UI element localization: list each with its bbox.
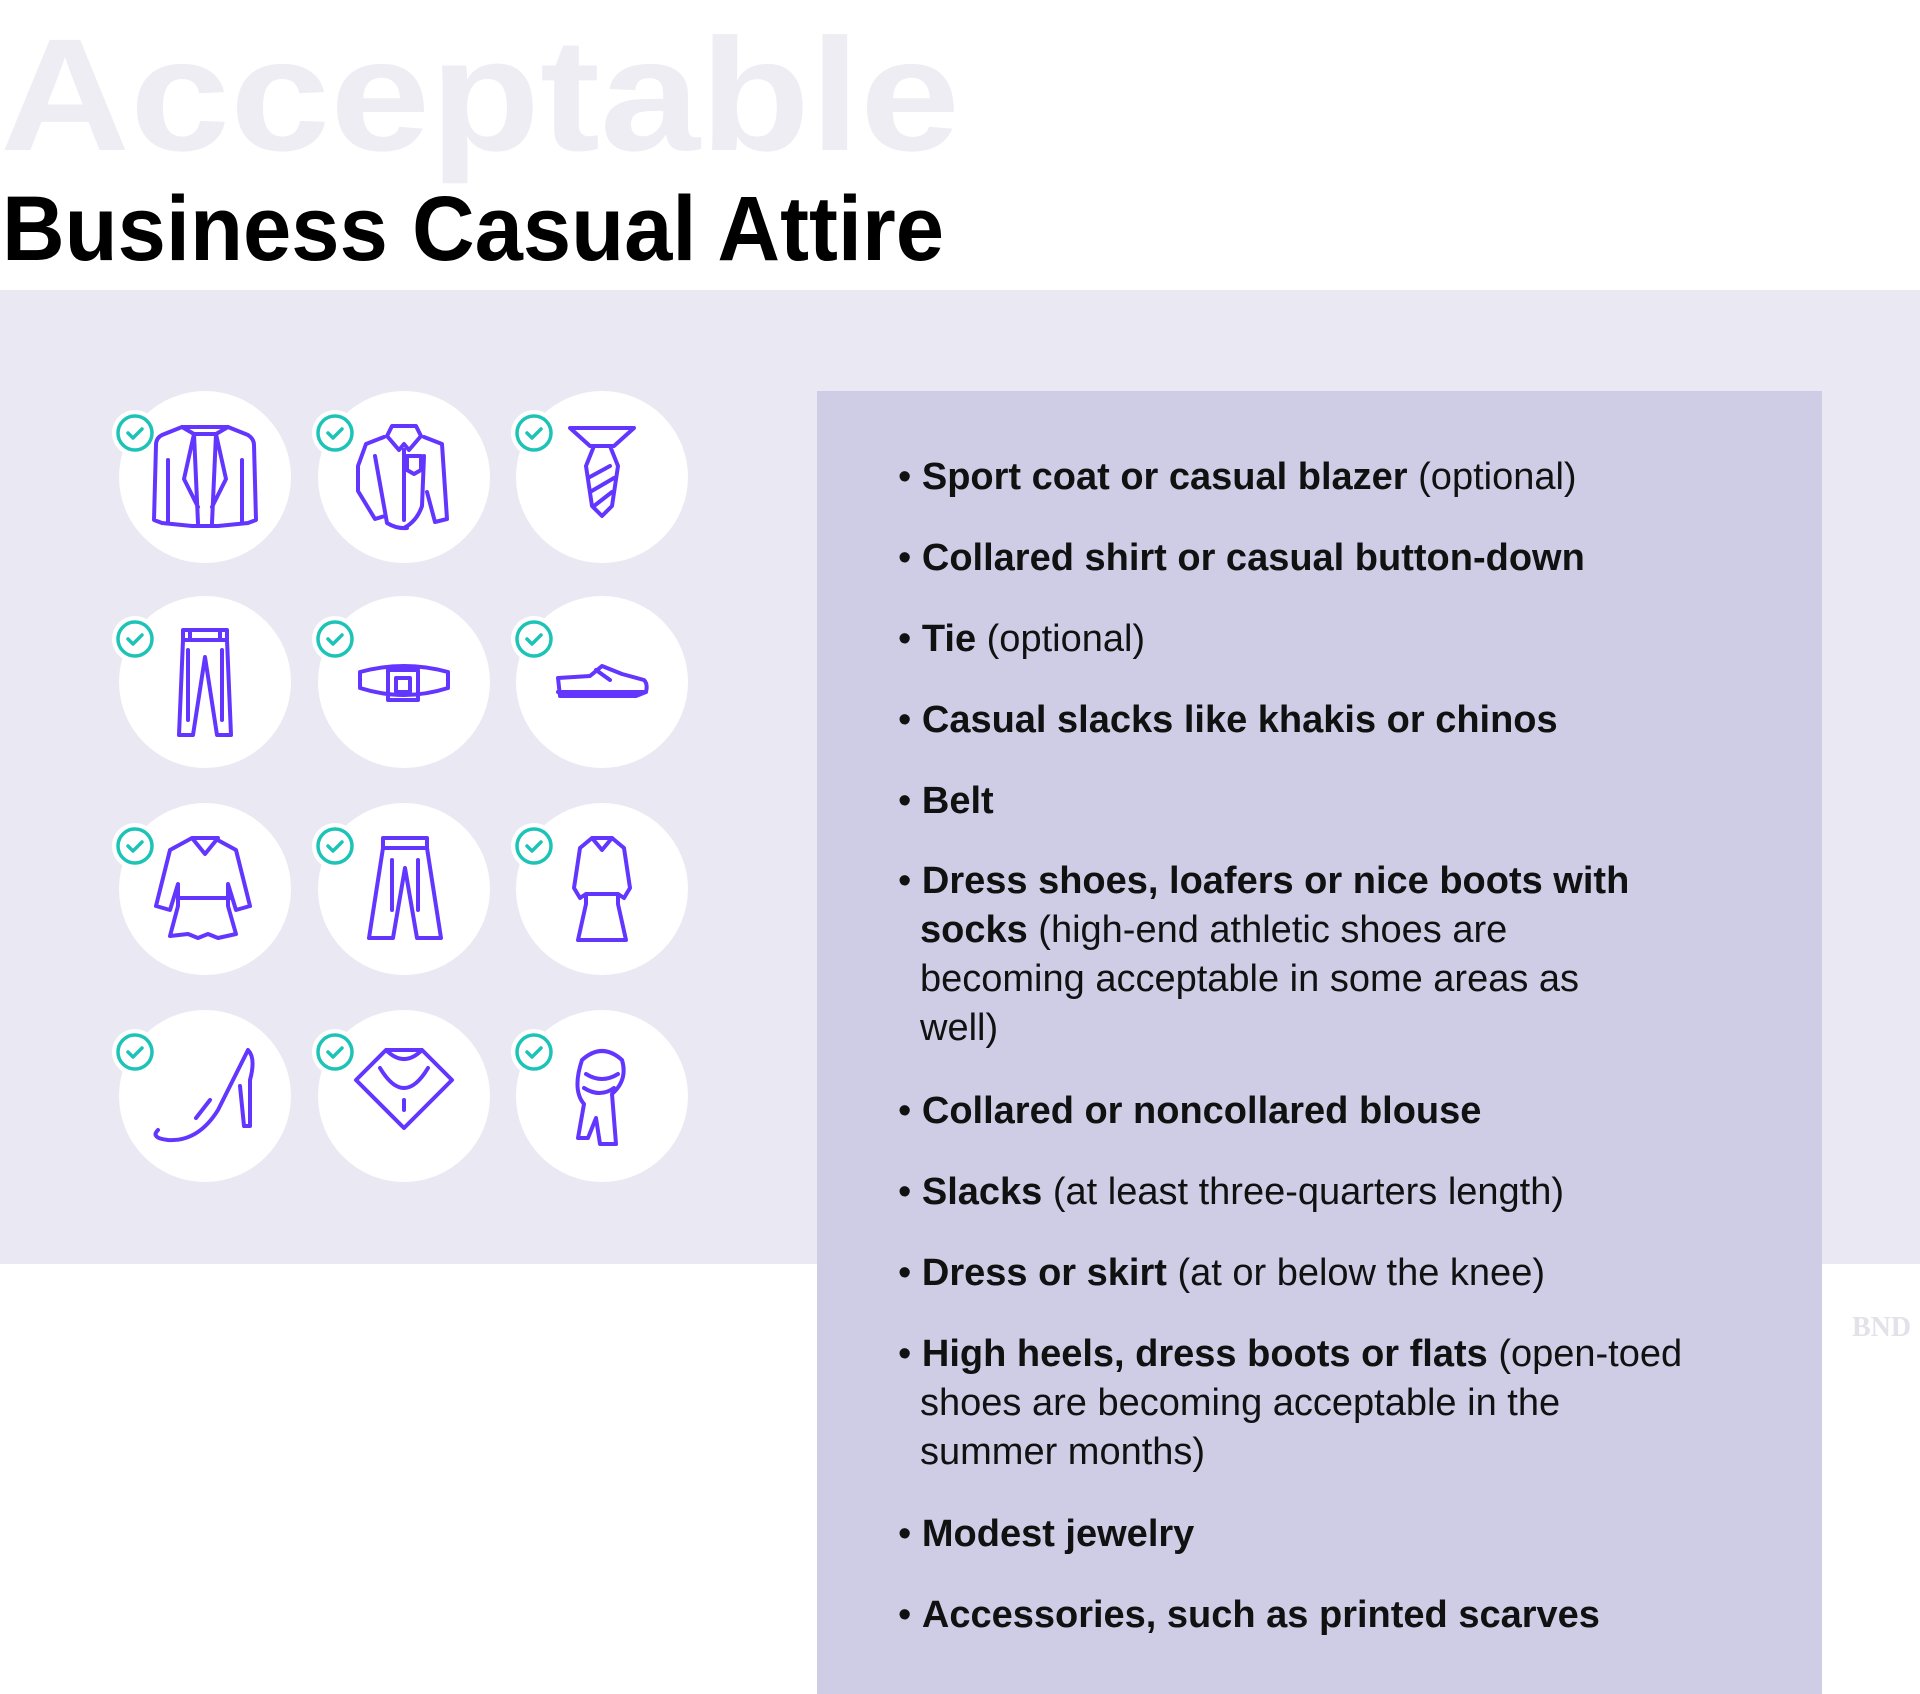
list item 3: • Tie (optional) (898, 618, 1145, 660)
list item 6 (898, 860, 1629, 1049)
icon: blouse (112, 803, 291, 975)
list item 6: well) (920, 1007, 998, 1049)
list item 8: • Slacks (at least three-quarters length) (898, 1171, 1564, 1213)
icon: belt (312, 596, 490, 768)
list item 12: • Accessories, such as printed scarves (898, 1594, 1600, 1636)
list item 11: • Modest jewelry (898, 1513, 1194, 1555)
list item 4: • Casual slacks like khakis or chinos (898, 699, 1558, 741)
icon: shirt (312, 391, 490, 563)
icon: necklace (312, 1010, 490, 1182)
icon: dress (511, 803, 688, 975)
icon: tie (511, 391, 688, 563)
list item 10: shoes are becoming acceptable in the (920, 1382, 1560, 1424)
list item 1: • Sport coat or casual blazer (optional) (898, 456, 1577, 498)
list item 9: • Dress or skirt (at or below the knee) (898, 1252, 1545, 1294)
list item 2: • Collared shirt or casual button-down (898, 537, 1585, 579)
watermark BND: BND (1852, 1312, 1911, 1343)
icon: blazer (112, 391, 291, 563)
list item 5: • Belt (898, 780, 994, 822)
icon: wide slacks (312, 803, 490, 975)
list item 6: • Dress shoes, loafers or nice boots with (898, 860, 1629, 902)
background panel (0, 290, 1920, 1264)
list item 6: becoming acceptable in some areas as (920, 958, 1579, 1000)
icon: high heel (112, 1010, 291, 1182)
list item 10: • High heels, dress boots or flats (open-toed (898, 1333, 1682, 1375)
list item 6: socks (high-end athletic shoes are (920, 909, 1507, 951)
list item 7: • Collared or noncollared blouse (898, 1090, 1481, 1132)
list item 10: summer months) (920, 1431, 1205, 1473)
icon grid (112, 391, 688, 1182)
icon: scarf (511, 1010, 688, 1182)
icon: trousers (112, 596, 291, 768)
panel: list (817, 391, 1822, 1694)
ghost title: Acceptable: Acceptable (0, 5, 960, 184)
list item 10 (898, 1333, 1682, 1473)
icon: loafer (511, 596, 688, 768)
